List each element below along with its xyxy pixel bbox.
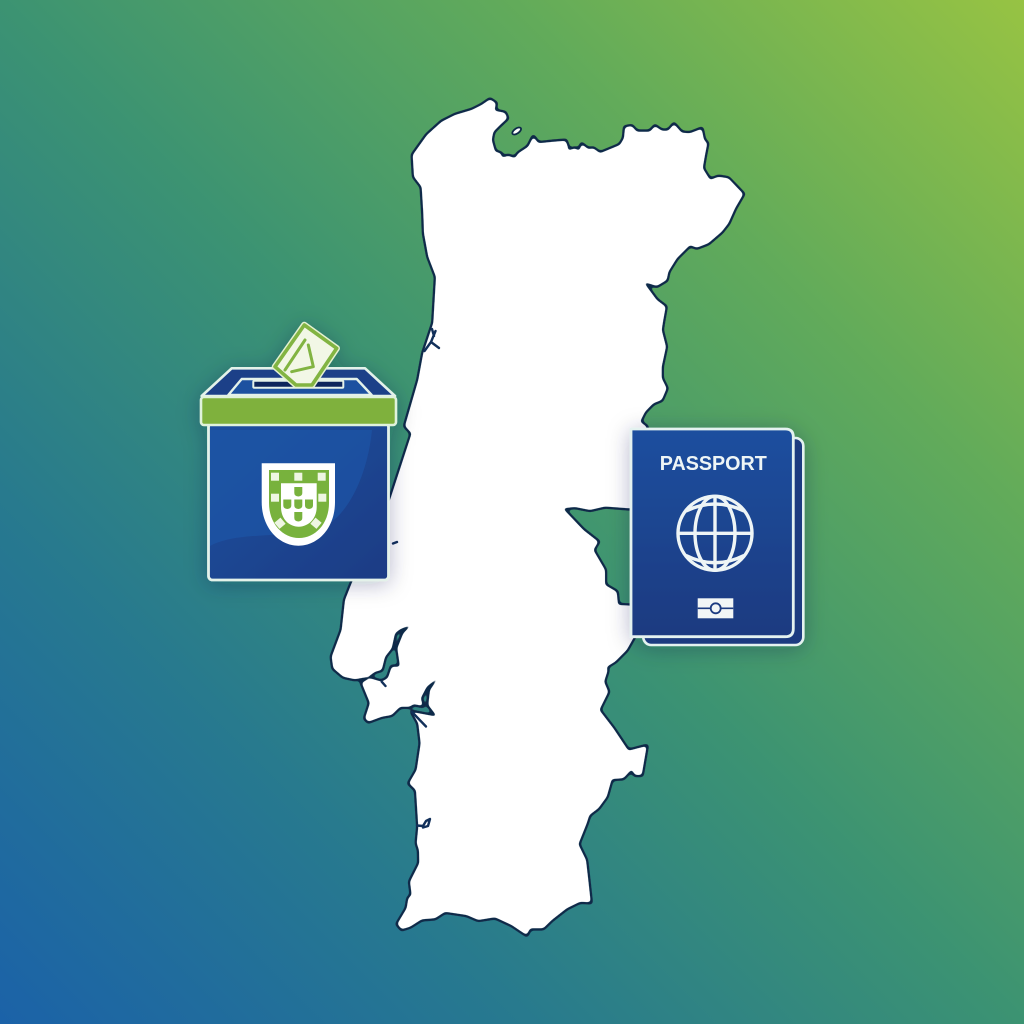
ballot box lid	[201, 397, 396, 425]
island off the north coast	[511, 126, 522, 136]
passport back cover	[643, 438, 803, 645]
ballot box top	[202, 368, 395, 396]
map of Portugal	[332, 99, 743, 935]
castles	[271, 473, 326, 529]
icon: Portuguese shield	[262, 463, 335, 546]
quinas	[283, 487, 313, 522]
icon: globe	[678, 496, 752, 570]
ballot box body	[208, 423, 388, 580]
icon: passport	[631, 429, 803, 645]
ballot slot	[253, 381, 343, 388]
icon: ballot box	[201, 325, 396, 580]
icon: passport chip symbol	[698, 598, 733, 618]
passport title: PASSPORT	[660, 453, 767, 475]
coastal lagoon marks	[382, 329, 439, 828]
passport front cover	[631, 429, 793, 637]
ballot paper	[275, 325, 337, 385]
